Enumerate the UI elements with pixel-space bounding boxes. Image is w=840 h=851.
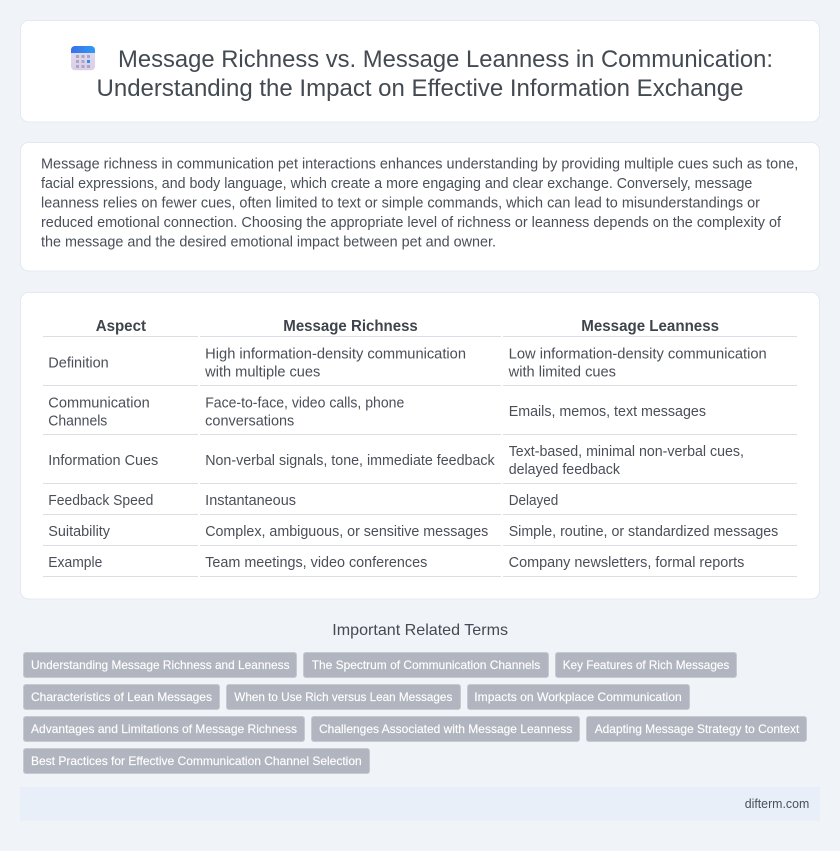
row: example: Company newsletters, formal reports: [509, 555, 744, 571]
tag: Challenges Associated with Message Leanness: [319, 722, 572, 736]
row: communication channels: Face-to-face, video calls, phone: [205, 395, 404, 411]
row: definition: Definition: [48, 355, 109, 371]
row: feedback speed: [48, 493, 558, 509]
title: [96, 46, 773, 102]
row: information cues: Text-based, minimal non-verbal cues,: [509, 444, 744, 460]
tag: Key Features of Rich Messages: [563, 658, 729, 672]
icon: calendar: [71, 46, 95, 70]
footer: difterm.com: [745, 796, 809, 811]
row: feedback speed: Feedback Speed: [48, 493, 153, 509]
footer: [20, 787, 820, 821]
tag: Characteristics of Lean Messages: [31, 690, 212, 704]
text block: summary: reduced emotional connection. Choosing the appropriate level of richness or leanness depends on the complexity of: [41, 215, 782, 231]
title: Understanding the Impact on Effective Information Exchange: [96, 75, 744, 102]
row: definition: Low information-density communication: [509, 346, 767, 362]
row: example: Example: [48, 555, 102, 571]
row: suitability: Simple, routine, or standardized messages: [509, 524, 778, 540]
row: definition: with multiple cues: [204, 364, 320, 380]
row: information cues: Information Cues: [48, 453, 158, 469]
panel: related term tags: [24, 652, 806, 774]
tag: Adapting Message Strategy to Context: [595, 722, 800, 736]
tag: [24, 684, 220, 710]
row: communication channels: conversations: [205, 413, 294, 429]
panel: summary paragraph: [20, 142, 820, 271]
panel: comparison table: [20, 292, 820, 599]
tag: Understanding Message Richness and Leanness: [31, 658, 290, 672]
row: definition: with limited cues: [508, 364, 616, 380]
tag: [556, 652, 736, 678]
tag: [312, 716, 580, 742]
tag: When to Use Rich versus Lean Messages: [234, 690, 452, 704]
table header: Message Richness: [283, 318, 418, 335]
row: suitability: Complex, ambiguous, or sensitive messages: [205, 524, 488, 540]
text block: summary: the message and the desired emotional impact between pet and owner.: [41, 234, 496, 250]
table header: [96, 318, 719, 335]
tag: [468, 684, 690, 710]
row: communication channels: Emails, memos, text messages: [509, 404, 706, 420]
tag: [24, 748, 370, 774]
row: definition: High information-density communication: [205, 346, 466, 362]
tag: Advantages and Limitations of Message Richness: [31, 722, 297, 736]
row: information cues: [48, 444, 744, 478]
row: information cues: Non-verbal signals, tone, immediate feedback: [205, 453, 495, 469]
row: communication channels: Communication: [48, 395, 150, 411]
row: communication channels: [48, 395, 706, 429]
tag: [24, 652, 296, 678]
row: information cues: delayed feedback: [509, 462, 621, 478]
title: Message Richness vs. Message Leanness in Communication:: [118, 46, 773, 73]
row: definition: [48, 346, 767, 380]
tag: [586, 716, 806, 742]
tag: Impacts on Workplace Communication: [474, 690, 682, 704]
text block: summary: Message richness in communication pet interactions enhances understanding by providing multiple cues such as tone,: [41, 156, 798, 172]
tag: [24, 716, 304, 742]
text block: summary: [41, 156, 798, 250]
row: example: [48, 555, 744, 571]
row: feedback speed: Instantaneous: [205, 493, 296, 509]
tag: [304, 652, 548, 678]
row: example: Team meetings, video conferences: [205, 555, 427, 571]
row: communication channels: Channels: [48, 413, 107, 429]
panel: title card: [20, 20, 820, 122]
tag: The Spectrum of Communication Channels: [312, 658, 540, 672]
row: feedback speed: Delayed: [509, 493, 558, 509]
row: suitability: [48, 524, 778, 540]
text block: summary: facial expressions, and body language, which create a more engaging and clear exchange. Conversely, message: [41, 176, 752, 192]
tag: [226, 684, 460, 710]
heading: important related terms: Important Related Terms: [332, 622, 508, 639]
table header: Aspect: [96, 318, 146, 335]
text block: summary: leanness relies on fewer cues, often limited to text or simple commands, which can lead to misunderstandings or: [41, 195, 760, 211]
row: suitability: Suitability: [48, 524, 111, 540]
table header: Message Leanness: [581, 318, 719, 335]
tag: Best Practices for Effective Communication Channel Selection: [31, 754, 362, 768]
